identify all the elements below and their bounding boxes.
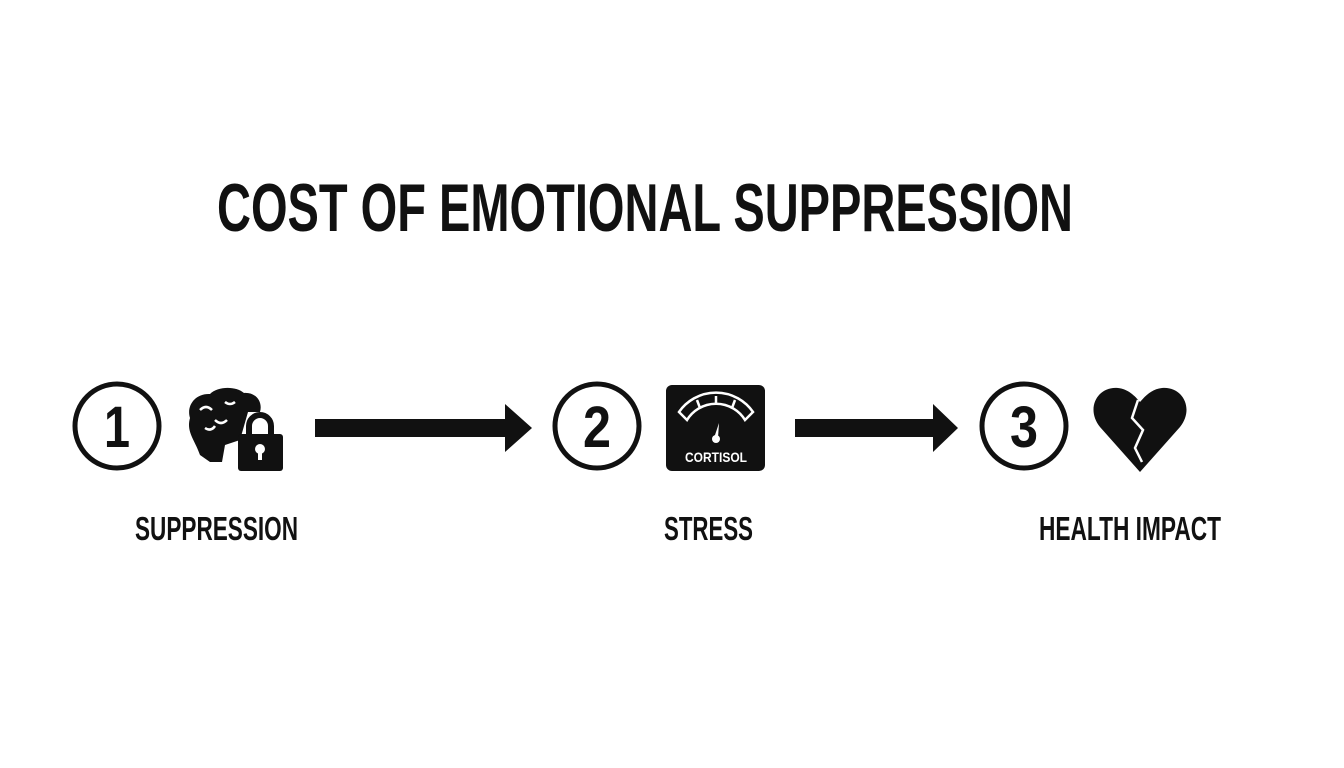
label: suppression: SUPPRESSION — [135, 510, 298, 547]
icon: brain with lock — [189, 388, 283, 471]
arrow 2 — [795, 404, 958, 452]
step 1 number circle: 1 — [104, 395, 130, 460]
icon: broken heart — [1093, 388, 1187, 472]
step 2 number circle: 2 — [583, 395, 611, 460]
step 3 number circle: 3 — [1010, 395, 1038, 460]
step 2 number circle — [555, 384, 639, 468]
step 1 number circle — [75, 384, 159, 468]
label: stress: STRESS — [664, 510, 753, 547]
label: health impact: HEALTH IMPACT — [1039, 510, 1221, 547]
arrow 1 — [315, 404, 532, 452]
icon: cortisol gauge: CORTISOL — [685, 449, 747, 465]
step 3 number circle — [982, 384, 1066, 468]
icon: cortisol gauge — [666, 385, 765, 471]
